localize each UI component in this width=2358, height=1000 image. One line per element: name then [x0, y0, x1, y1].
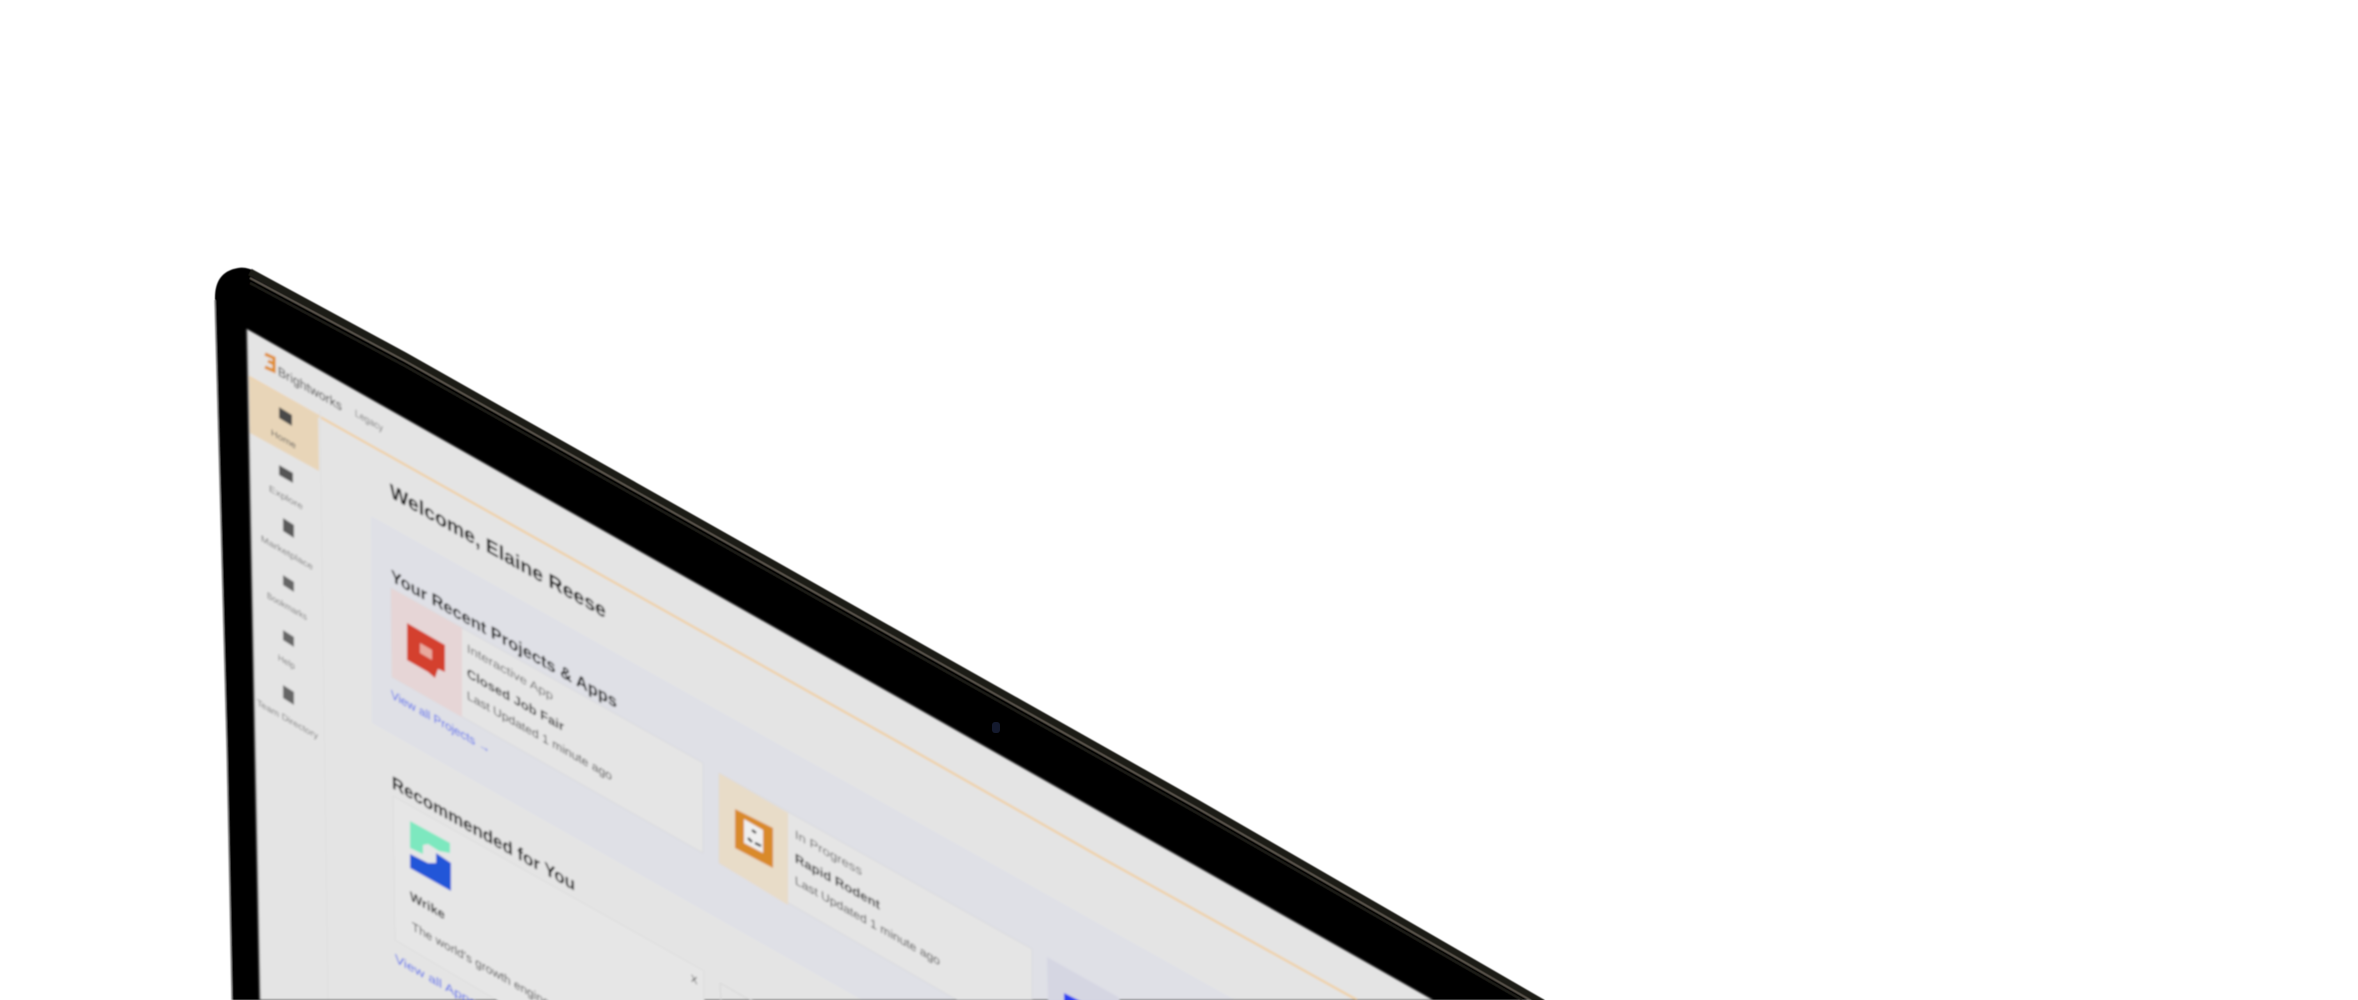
sidebar label: bookmarks: Bookmarks [267, 591, 307, 623]
screen [247, 329, 1433, 1000]
sidebar icon: home [279, 407, 292, 426]
icon: blue shape [410, 853, 451, 891]
sidebar icon: directory [283, 685, 294, 705]
logo name: Brightworks [278, 363, 342, 414]
icon: blue mark [1064, 993, 1082, 1000]
icon marks [748, 830, 761, 846]
project name: Closed Job Fair [467, 665, 565, 735]
section heading: recommended: Recommended for You [392, 772, 575, 896]
sidebar icon: help [283, 630, 294, 647]
sidebar divider [320, 410, 328, 1000]
sidebar icon: marketplace [283, 518, 294, 538]
project card 2 [719, 773, 1032, 1000]
icon glyph [420, 643, 432, 660]
icon inner page [744, 819, 763, 853]
panel: recent projects [371, 516, 1235, 1000]
sidebar label: help: Help [278, 653, 295, 672]
app name: Wrike [410, 888, 445, 923]
sidebar icon: explore [279, 465, 293, 483]
recommended card 2 outline [720, 983, 760, 1000]
logo mark [265, 354, 274, 371]
project type: Interactive App [467, 641, 553, 703]
icon: orange document [735, 809, 773, 868]
sidebar label: directory: Team Directory [257, 698, 318, 742]
project card 3 thumbnail [1047, 957, 1120, 1000]
project name: Rapid Rodent [795, 850, 880, 913]
top navigation item: Legacy [355, 408, 384, 435]
icon: red speech bubble [407, 623, 445, 678]
welcome heading: Welcome, Elaine Reese [390, 479, 606, 623]
icon: mint shape [410, 821, 450, 854]
close icon: x [691, 969, 698, 987]
sidebar active tile [249, 377, 319, 471]
header divider line [249, 377, 1357, 1000]
section heading: recent projects: Your Recent Projects & Apps [391, 565, 617, 712]
recommended card 1 [393, 796, 704, 1000]
thumbnail background [719, 773, 788, 905]
sidebar icon: bookmarks [283, 575, 294, 592]
sidebar label: home: Home [271, 428, 296, 452]
link: view all projects: View all Projects → [391, 687, 490, 757]
laptop bezel [215, 268, 1543, 1000]
project type: In Progress [795, 827, 862, 879]
project card 1 [391, 588, 703, 853]
sidebar label: explore: Explore [269, 484, 303, 513]
project updated: Last Updated 1 minute ago [467, 688, 612, 783]
project updated: Last Updated 1 minute ago [795, 873, 940, 968]
sidebar label: marketplace: Marketplace [261, 534, 313, 573]
thumbnail background [391, 588, 462, 717]
camera [992, 722, 1000, 733]
